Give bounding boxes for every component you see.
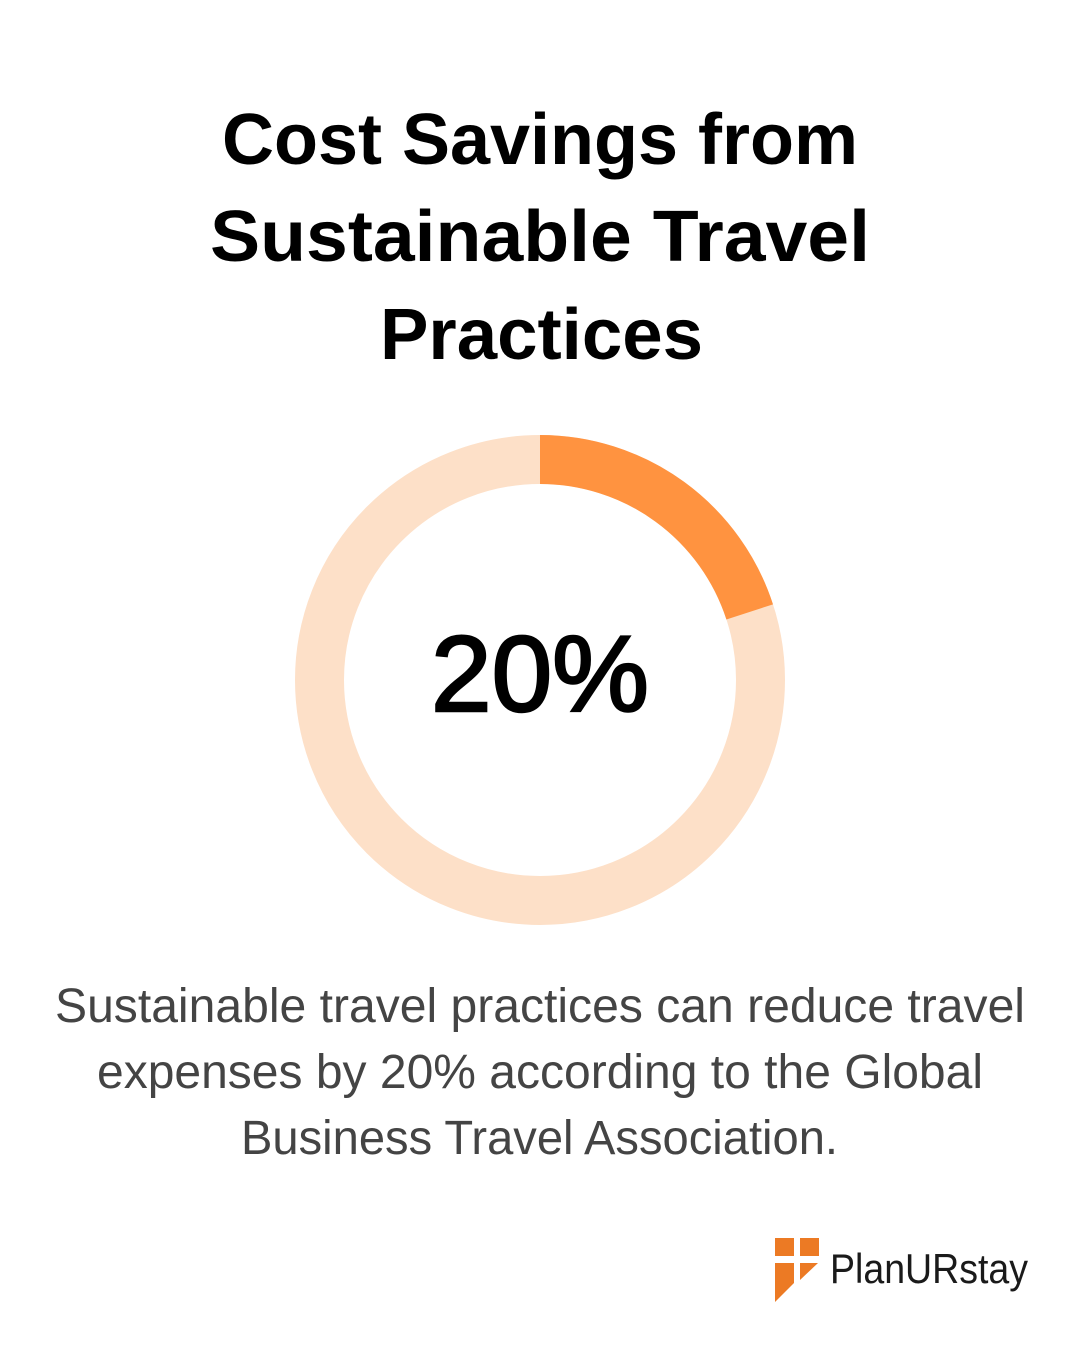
description text [55,980,1025,1165]
title: Practices [380,295,703,375]
description text: Sustainable travel practices can reduce travel [55,980,1025,1033]
donut highlighted segment [540,460,750,612]
logo: PlanURstay [775,1238,1028,1302]
logo icon [775,1238,819,1302]
center value: 20% [431,613,649,734]
title: Sustainable Travel [210,197,870,277]
title: Cost Savings from [222,100,858,180]
donut chart: 20% [320,460,760,900]
title [210,100,870,375]
description text: Business Travel Association. [241,1112,838,1165]
donut track [320,460,760,900]
logo wordmark: PlanURstay [830,1245,1028,1292]
description text: expenses by 20% according to the Global [97,1046,983,1099]
